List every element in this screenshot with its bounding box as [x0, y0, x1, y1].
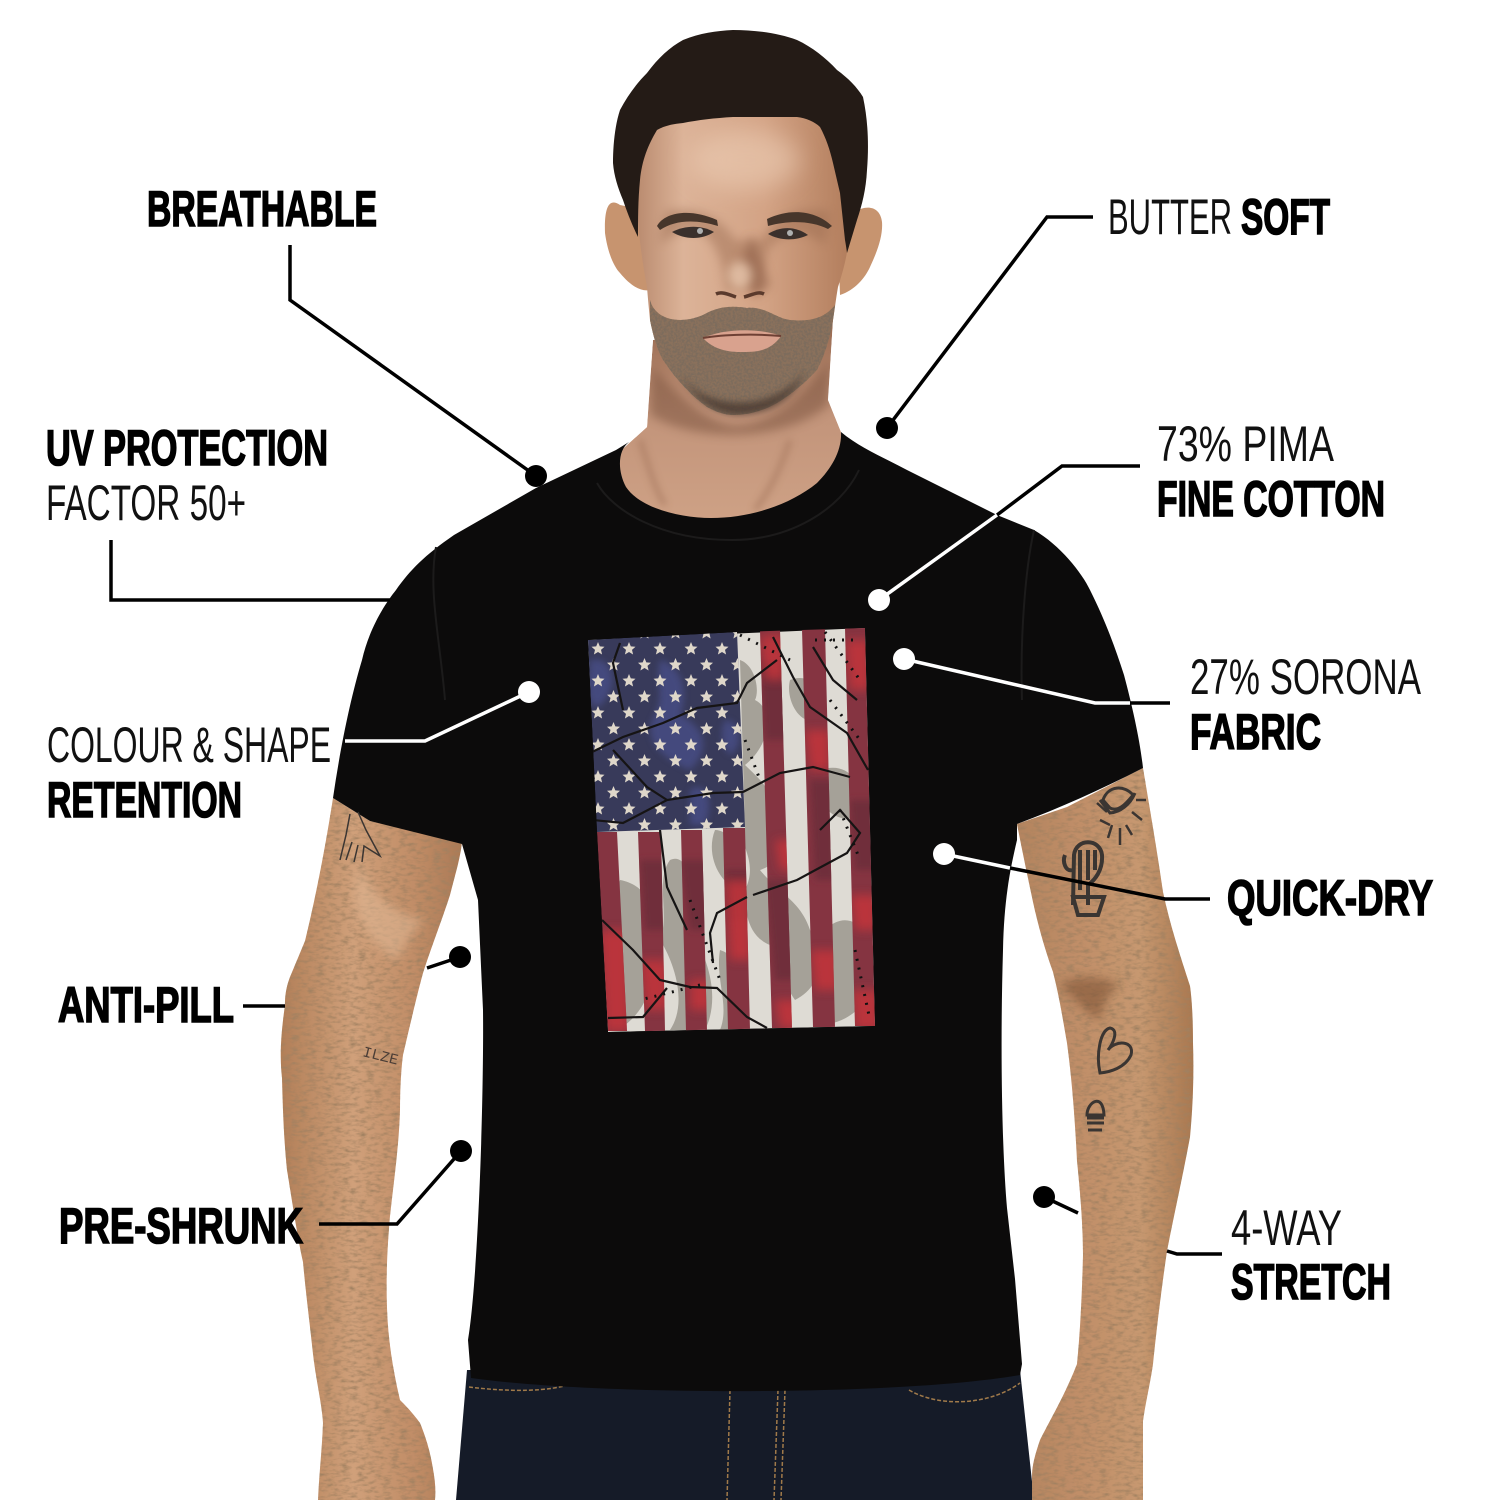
dot: [525, 465, 547, 487]
canton blue camo: [588, 659, 739, 825]
hair: [613, 30, 868, 253]
label bold: ANTI-PILL: [58, 977, 234, 1033]
dot: [933, 843, 955, 865]
red stripes: [597, 628, 875, 1031]
callout: 4-way stretch: [1033, 1186, 1391, 1310]
callout: 73% pima: [868, 416, 1385, 611]
label bold: STRETCH: [1231, 1254, 1391, 1310]
canton: [588, 632, 745, 832]
callout: butter soft: [876, 189, 1330, 439]
label light: FACTOR 50+: [46, 475, 246, 531]
leader line: [345, 692, 529, 741]
leader line white: [944, 854, 1010, 868]
tattoo: word: ILZE: [361, 1044, 400, 1070]
callout: quick-dry: [933, 843, 1433, 926]
dot: [518, 681, 540, 703]
right arm: [1017, 768, 1193, 1500]
man wearing t-shirt: [281, 30, 1193, 1500]
dot: [1033, 1186, 1055, 1208]
t-shirt body: [333, 432, 1143, 1391]
leader line black: [1130, 701, 1170, 705]
label bold: FABRIC: [1190, 704, 1321, 760]
callout: uv protection: [46, 420, 390, 600]
head: [605, 30, 882, 415]
left arm: [281, 798, 462, 1500]
eyes and brows: [657, 212, 832, 239]
dot: [893, 648, 915, 670]
label light: 4-WAY: [1231, 1200, 1342, 1256]
leader line: [1044, 1197, 1222, 1254]
jeans stitching: [469, 1383, 1020, 1500]
leader line black: [1010, 868, 1210, 899]
label bold: RETENTION: [47, 772, 242, 828]
tattoo: rays: [1097, 800, 1146, 845]
jaw shadow: [650, 360, 830, 435]
label bold: UV PROTECTION: [46, 420, 328, 476]
tattoo: cactus: [1064, 842, 1104, 915]
leader line: [319, 1151, 461, 1224]
leader line: [887, 217, 1093, 428]
flag print: [588, 620, 888, 1040]
mouth: [703, 330, 781, 352]
bright red camo: [600, 635, 880, 1032]
cheek and eye socket shadow: [660, 210, 830, 290]
leader line: [243, 957, 460, 1006]
tattoo: sunburst hat: [1100, 788, 1135, 813]
heading: BREATHABLE: [147, 181, 377, 237]
distress speckle: [640, 632, 870, 1020]
cracks: [590, 637, 868, 1028]
label bold: FINE COTTON: [1157, 471, 1385, 527]
neck tendons: [640, 440, 790, 510]
face: [636, 100, 850, 415]
label light: 73% PIMA: [1157, 416, 1334, 472]
dot: [876, 417, 898, 439]
neck: [616, 320, 845, 528]
jeans: [456, 1370, 1034, 1500]
tattoos: [340, 788, 1146, 1130]
tattoo: broken heart: [1098, 1028, 1132, 1073]
dot: [450, 1140, 472, 1162]
darker camo in red: [640, 660, 880, 980]
callout: breathable: [147, 181, 547, 487]
chin beard shadow: [680, 372, 805, 415]
leader line white: [904, 659, 1130, 703]
leader line: [290, 245, 536, 476]
label light: BUTTER: [1108, 189, 1232, 245]
mouth line: [703, 335, 781, 338]
elbow crease shadow: [356, 865, 425, 960]
tattoo: hand: [340, 812, 380, 862]
nose: [716, 235, 770, 298]
dot: [868, 589, 890, 611]
collar ribbing and seams: [433, 470, 1034, 700]
tattoo: burger: [1087, 1101, 1104, 1130]
label light: COLOUR & SHAPE: [47, 717, 331, 773]
label bold: SOFT: [1241, 189, 1330, 245]
camouflage blobs: [620, 660, 855, 1030]
leader line: [111, 540, 390, 600]
forehead highlight: [690, 130, 800, 190]
beard: [650, 300, 835, 415]
elbow crease shadow: [1060, 978, 1120, 1020]
callout: colour and shape: [47, 681, 540, 828]
leader line white: [879, 515, 997, 600]
callout: pre-shrunk: [59, 1140, 472, 1254]
label bold: PRE-SHRUNK: [59, 1198, 303, 1254]
callout: 27% sorona: [893, 648, 1421, 760]
callout: anti-pill: [58, 946, 471, 1033]
dot: [449, 946, 471, 968]
leader line black: [997, 466, 1140, 515]
flag white base: [588, 628, 875, 1032]
canton stars: [588, 630, 748, 835]
ears: [605, 202, 882, 295]
